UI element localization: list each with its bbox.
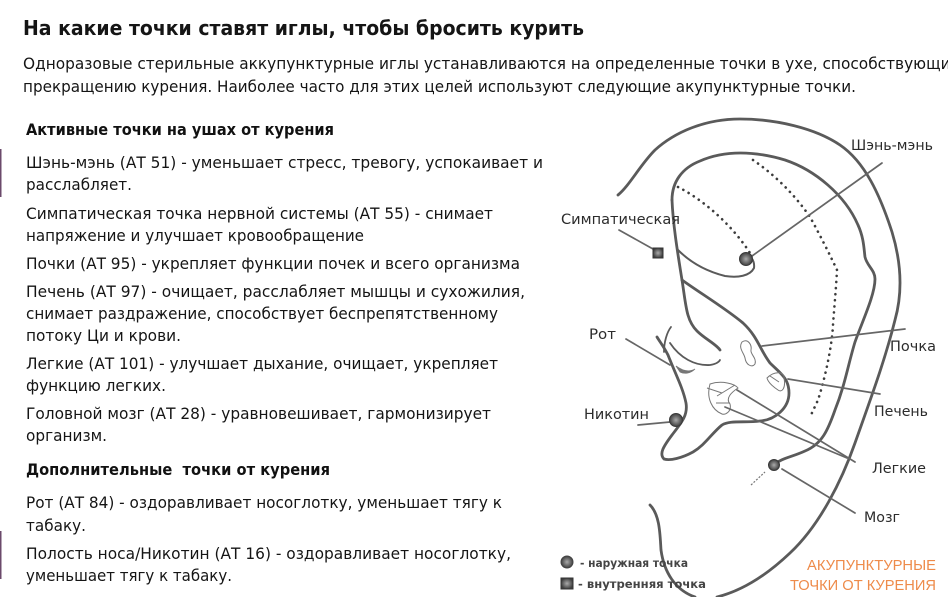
list: active points: Легкие (АТ 101) - улучшает дыхание, очищает, укрепляет — [26, 354, 498, 373]
label: mouth: Рот — [589, 327, 617, 343]
list: active points: Шэнь-мэнь (АТ 51) - уменьшает стресс, тревогу, успокаивает и — [26, 153, 543, 172]
ear upper loop — [678, 250, 754, 277]
list: additional points: табаку. — [26, 516, 86, 535]
legend: inner point: - внутренняя точка — [578, 577, 706, 591]
list: additional points: уменьшает тягу к табаку. — [26, 566, 232, 585]
list: active points: напряжение и улучшает кровообращение — [26, 226, 364, 245]
ear concha outline — [657, 280, 789, 460]
list: active points: Печень (АТ 97) - очищает, расслабляет мышцы и сухожилия, — [26, 282, 525, 301]
list: active points: потоку Ци и крови. — [26, 326, 181, 345]
list: active points: Головной мозг (АТ 28) - уравновешивает, гармонизирует — [26, 404, 491, 423]
ear diagram — [561, 119, 936, 597]
label: lungs: Легкие — [872, 461, 926, 477]
intro text: прекращению курения. Наиболее часто для этих целей используют следующие акупунктурные точки. — [23, 77, 856, 96]
legend — [561, 556, 706, 591]
list: additional points — [26, 493, 511, 585]
dotted line upper — [678, 187, 750, 253]
ear antitragus curve — [670, 343, 720, 365]
label: sympathetic: Симпатическая — [561, 212, 680, 228]
lung and brain mark — [707, 382, 738, 414]
point: brain — [768, 460, 780, 470]
list: active points: Почки (АТ 95) - укрепляет функции почек и всего организма — [26, 254, 520, 273]
list: active points — [26, 153, 543, 445]
label: liver: Печень — [874, 404, 928, 420]
ear inner helix — [672, 153, 875, 465]
mouth mark — [676, 366, 695, 373]
kidney mark — [741, 341, 755, 366]
point: nicotine — [670, 414, 682, 426]
list: additional points: Полость носа/Никотин (АТ 16) - оздоравливает носоглотку, — [26, 544, 511, 563]
list: active points: расслабляет. — [26, 175, 132, 194]
label: Shen-men: Шэнь-мэнь — [851, 138, 933, 154]
orange caption — [790, 558, 936, 594]
dotted line lower — [751, 472, 765, 485]
ear lobe edge — [650, 505, 695, 597]
intro text — [23, 54, 948, 96]
list: active points: организм. — [26, 426, 107, 445]
leader lines — [619, 163, 905, 513]
liver mark — [767, 373, 785, 391]
point: Shen-men — [740, 252, 752, 266]
label: brain: Мозг — [864, 510, 900, 526]
title: На какие точки ставят иглы, чтобы бросить курить — [23, 16, 584, 40]
list: active points: Симпатическая точка нервной системы (АТ 55) - снимает — [26, 204, 493, 223]
point: sympathetic — [653, 248, 663, 258]
orange caption: АКУПУНКТУРНЫЕ — [807, 558, 936, 574]
ear antihelix left wall — [672, 200, 720, 350]
label: kidney: Почка — [890, 339, 936, 355]
label: nicotine: Никотин — [584, 407, 649, 423]
heading: additional points: Дополнительные точки от курения — [26, 460, 330, 479]
list: additional points: Рот (АТ 84) - оздоравливает носоглотку, уменьшает тягу к — [26, 493, 502, 512]
ear outer helix — [618, 119, 900, 597]
list: active points: снимает раздражение, способствует беспрепятственному — [26, 304, 498, 323]
list: active points: функцию легких. — [26, 376, 166, 395]
left edge marks — [0, 149, 2, 579]
ear small fork — [664, 327, 671, 352]
heading: active points: Активные точки на ушах от курения — [26, 120, 334, 139]
dotted line outer — [753, 160, 837, 415]
orange caption: ТОЧКИ ОТ КУРЕНИЯ — [790, 578, 936, 594]
legend: outer point: - наружная точка — [580, 556, 688, 570]
